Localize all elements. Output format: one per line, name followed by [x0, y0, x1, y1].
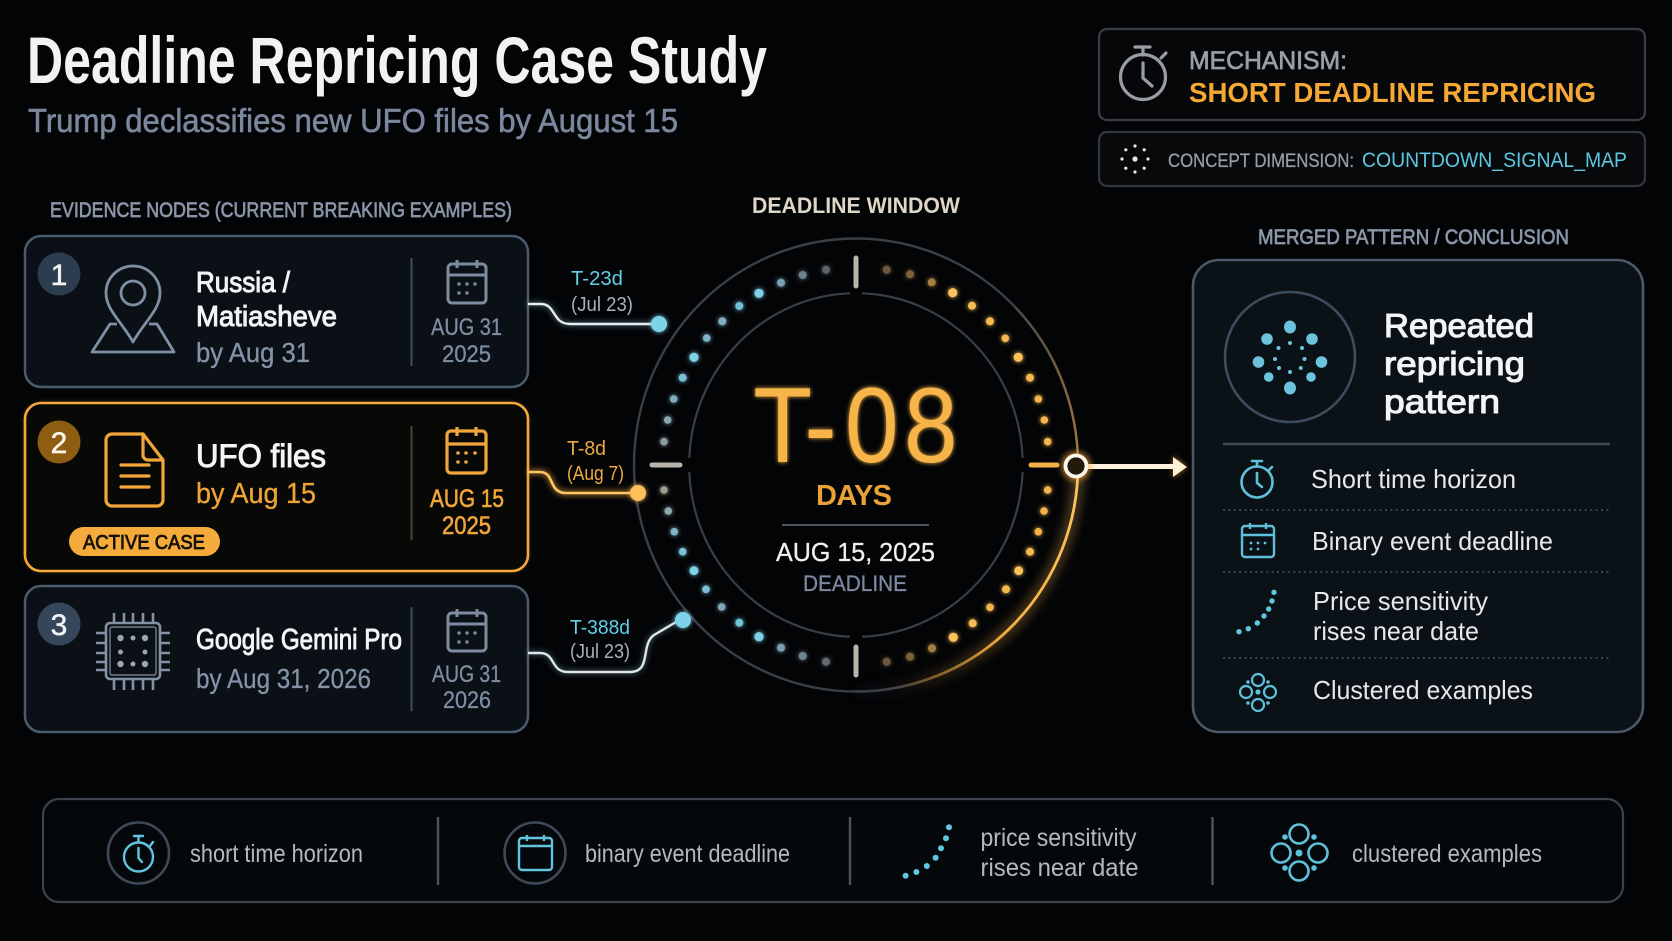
- case 3 date: 2026: [443, 687, 491, 714]
- label: T-388d: (Jul 23): [570, 641, 630, 663]
- panel: concept dimension: [1099, 132, 1645, 186]
- case 3 date: [432, 661, 501, 714]
- badge 1: 1: [51, 259, 67, 292]
- case 3 by date: by Aug 31, 2026: [196, 663, 371, 694]
- countdown ring: [634, 238, 1078, 692]
- case 1 date: 2025: [442, 341, 491, 368]
- panel: mechanism: [1099, 29, 1645, 120]
- row: short time horizon: [1242, 461, 1516, 498]
- label: T-23d: T-23d: [571, 268, 623, 290]
- case 3 name: Google Gemini Pro: [196, 624, 402, 656]
- label: T-23d: [571, 268, 633, 316]
- legend: clustered examples: [1272, 824, 1542, 880]
- label: T-8d: [567, 438, 624, 485]
- legend: binary event deadline: [504, 822, 790, 884]
- concept label: CONCEPT DIMENSION:: [1168, 151, 1354, 172]
- big number: T-08: [753, 365, 958, 485]
- row: short time horizon: Short time horizon: [1311, 464, 1516, 494]
- legend: clustered examples: clustered examples: [1352, 840, 1542, 868]
- icon: chip: [96, 613, 170, 690]
- case 1 name: Russia /: [196, 267, 291, 299]
- conclusion heading: repricing: [1384, 345, 1525, 382]
- dots: countdown side: [883, 266, 1051, 666]
- case 1 date: [431, 314, 502, 368]
- icon: calendar: [448, 260, 486, 303]
- conclusion heading: pattern: [1384, 383, 1500, 420]
- dots: elapsed side: [660, 266, 830, 666]
- heading: evidence nodes: EVIDENCE NODES (CURRENT BREAKING EXAMPLES): [50, 199, 512, 222]
- connector: case 1 to ring: [528, 268, 667, 332]
- icon: dotted circle: [1120, 144, 1150, 174]
- row: clustered examples: Clustered examples: [1313, 675, 1533, 705]
- icon: calendar: [448, 609, 486, 651]
- label: T-8d: T-8d: [567, 438, 606, 460]
- title: Deadline Repricing Case Study: [27, 23, 767, 97]
- label: T-8d: (Aug 7): [567, 463, 624, 485]
- row: clustered examples: [1240, 674, 1533, 711]
- row: price sensitivity: [1236, 586, 1488, 646]
- conclusion heading: [1384, 307, 1534, 420]
- icon: map pin: [92, 266, 174, 352]
- badge 3: [38, 602, 80, 646]
- deadline label: DEADLINE: [803, 571, 907, 596]
- pill: active case: [69, 527, 220, 556]
- icon: calendar: [447, 427, 486, 473]
- case 2 by date: by Aug 15: [196, 478, 316, 510]
- heading: merged pattern: MERGED PATTERN / CONCLUSION: [1258, 226, 1569, 249]
- concept value: COUNTDOWN_SIGNAL_MAP: [1362, 149, 1627, 172]
- icon: repricing cluster: [1225, 292, 1355, 422]
- pill: active case: ACTIVE CASE: [83, 532, 205, 554]
- row: binary event deadline: Binary event deadline: [1312, 526, 1553, 556]
- panel: legend bar: [43, 799, 1623, 902]
- case 2 date: [430, 485, 504, 540]
- panel: case 1: [25, 236, 528, 387]
- panel: case 2 active: [25, 403, 528, 571]
- case 2 name: UFO files: [196, 438, 326, 474]
- case 1 by date: by Aug 31: [196, 337, 310, 368]
- badge 2: 2: [51, 427, 67, 460]
- label: T-23d: (Jul 23): [571, 294, 633, 316]
- days label: DAYS: [816, 480, 892, 512]
- case 1 date: AUG 31: [431, 314, 502, 341]
- legend: price sensitivity: rises near date: [980, 854, 1138, 882]
- row: price sensitivity: Price sensitivity: [1313, 586, 1488, 616]
- connector: case 3 to ring: [528, 612, 691, 672]
- legend: price sensitivity: [903, 824, 1138, 882]
- case 1 name: Matiasheve: [196, 301, 337, 333]
- row: binary event deadline: [1242, 523, 1553, 557]
- ticks: [652, 258, 1057, 675]
- mechanism label: MECHANISM:: [1189, 47, 1347, 75]
- arrow: ring to conclusion: [1061, 451, 1187, 481]
- countdown readout: [753, 365, 958, 596]
- case 2 date: AUG 15: [430, 485, 504, 513]
- case 3 date: AUG 31: [432, 661, 501, 688]
- icon: stopwatch: [1120, 47, 1166, 100]
- row: price sensitivity: rises near date: [1313, 616, 1479, 646]
- connector: case 2 to ring: [528, 438, 646, 501]
- legend: short time horizon: short time horizon: [190, 840, 363, 868]
- panel: case 3: [25, 586, 528, 732]
- case 2 date: 2025: [442, 512, 491, 540]
- badge 1: [38, 252, 80, 296]
- heading: deadline window: DEADLINE WINDOW: [752, 193, 960, 218]
- icon: document: [106, 434, 163, 506]
- legend: price sensitivity: price sensitivity: [980, 824, 1137, 852]
- badge 2: [38, 420, 80, 464]
- subtitle: Trump declassifies new UFO files by August 15: [28, 102, 678, 139]
- label: T-388d: T-388d: [570, 617, 630, 639]
- label: T-388d: [570, 617, 630, 663]
- legend: binary event deadline: binary event deadline: [585, 840, 790, 868]
- badge 3: 3: [51, 609, 67, 642]
- case 1 name: [196, 267, 337, 333]
- legend: short time horizon: [108, 822, 363, 884]
- panel: conclusion: [1193, 260, 1643, 732]
- mechanism name: SHORT DEADLINE REPRICING: [1189, 77, 1596, 108]
- conclusion heading: Repeated: [1384, 307, 1534, 344]
- deadline date: AUG 15, 2025: [776, 537, 935, 567]
